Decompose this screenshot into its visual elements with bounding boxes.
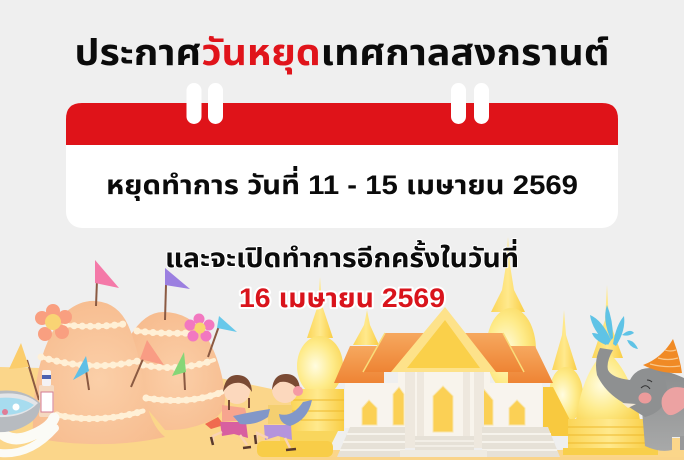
back legs and body (638, 370, 684, 451)
hat (643, 339, 682, 373)
flag: yellow (9, 343, 39, 400)
child right (255, 374, 303, 450)
gold stairs (543, 387, 570, 436)
water bowls (233, 400, 312, 426)
calendar card (66, 83, 618, 228)
upper roof (363, 333, 524, 372)
illustration: temple (334, 307, 560, 459)
stupa: far left (257, 277, 344, 457)
gable (391, 307, 496, 372)
binder rings left (186, 83, 223, 124)
flag: pink (95, 260, 119, 306)
closure dates: หยุดทำการ วันที่ 11 - 15 เมษายน 2569 (106, 166, 578, 201)
stairs (337, 427, 560, 459)
bowl rim highlight (0, 393, 38, 417)
perfume bottle (39, 370, 54, 417)
jasmine garland (0, 418, 55, 453)
sand ground (0, 367, 684, 460)
sand strip (300, 457, 684, 460)
reopening text: และจะเปิดทำการอีกครั้งในวันที่ (165, 239, 519, 273)
trunk and head (596, 348, 667, 417)
stupa: back center (486, 237, 536, 392)
title: ประกาศ วันหยุด เทศกาลสงกรานต์ (74, 32, 610, 74)
calendar red header (66, 103, 618, 145)
reopening date: 16 เมษายน 2569 (239, 283, 445, 313)
illustration: silver bowl, bottle, garland (0, 370, 55, 453)
rear leg (680, 436, 684, 450)
tusk (622, 403, 636, 408)
side roofs (334, 346, 553, 383)
eye (641, 380, 652, 389)
windows (362, 386, 525, 432)
illustration: sand pagodas (9, 260, 237, 444)
flag: coral (131, 340, 164, 387)
bowl water (0, 398, 34, 415)
cheek (638, 392, 652, 404)
ear (662, 387, 684, 415)
flag: purple (165, 268, 190, 320)
pearl garlands (41, 324, 222, 419)
flag: sky blue right (208, 316, 237, 357)
illustration: gold stupas (257, 237, 658, 457)
binder rings right (451, 83, 489, 124)
calendar body (66, 103, 618, 228)
illustration: elephant (590, 305, 684, 451)
hat bands (650, 350, 680, 367)
stupa: small left (353, 310, 379, 345)
center bay (398, 372, 490, 437)
illustration: children playing (205, 374, 312, 450)
child left (205, 375, 252, 448)
stupa: right large (563, 285, 658, 455)
silver bowl (0, 390, 40, 432)
right sand mound (130, 312, 225, 430)
flag: blue left (73, 356, 89, 390)
walls (345, 383, 542, 428)
flower: pink (184, 314, 214, 342)
left sand mound (33, 301, 165, 444)
flower: orange (35, 304, 72, 341)
flag: green (172, 352, 186, 390)
columns (405, 372, 484, 448)
stupa: right middle (549, 310, 583, 423)
water spray (590, 305, 638, 349)
eave trim (363, 333, 524, 372)
